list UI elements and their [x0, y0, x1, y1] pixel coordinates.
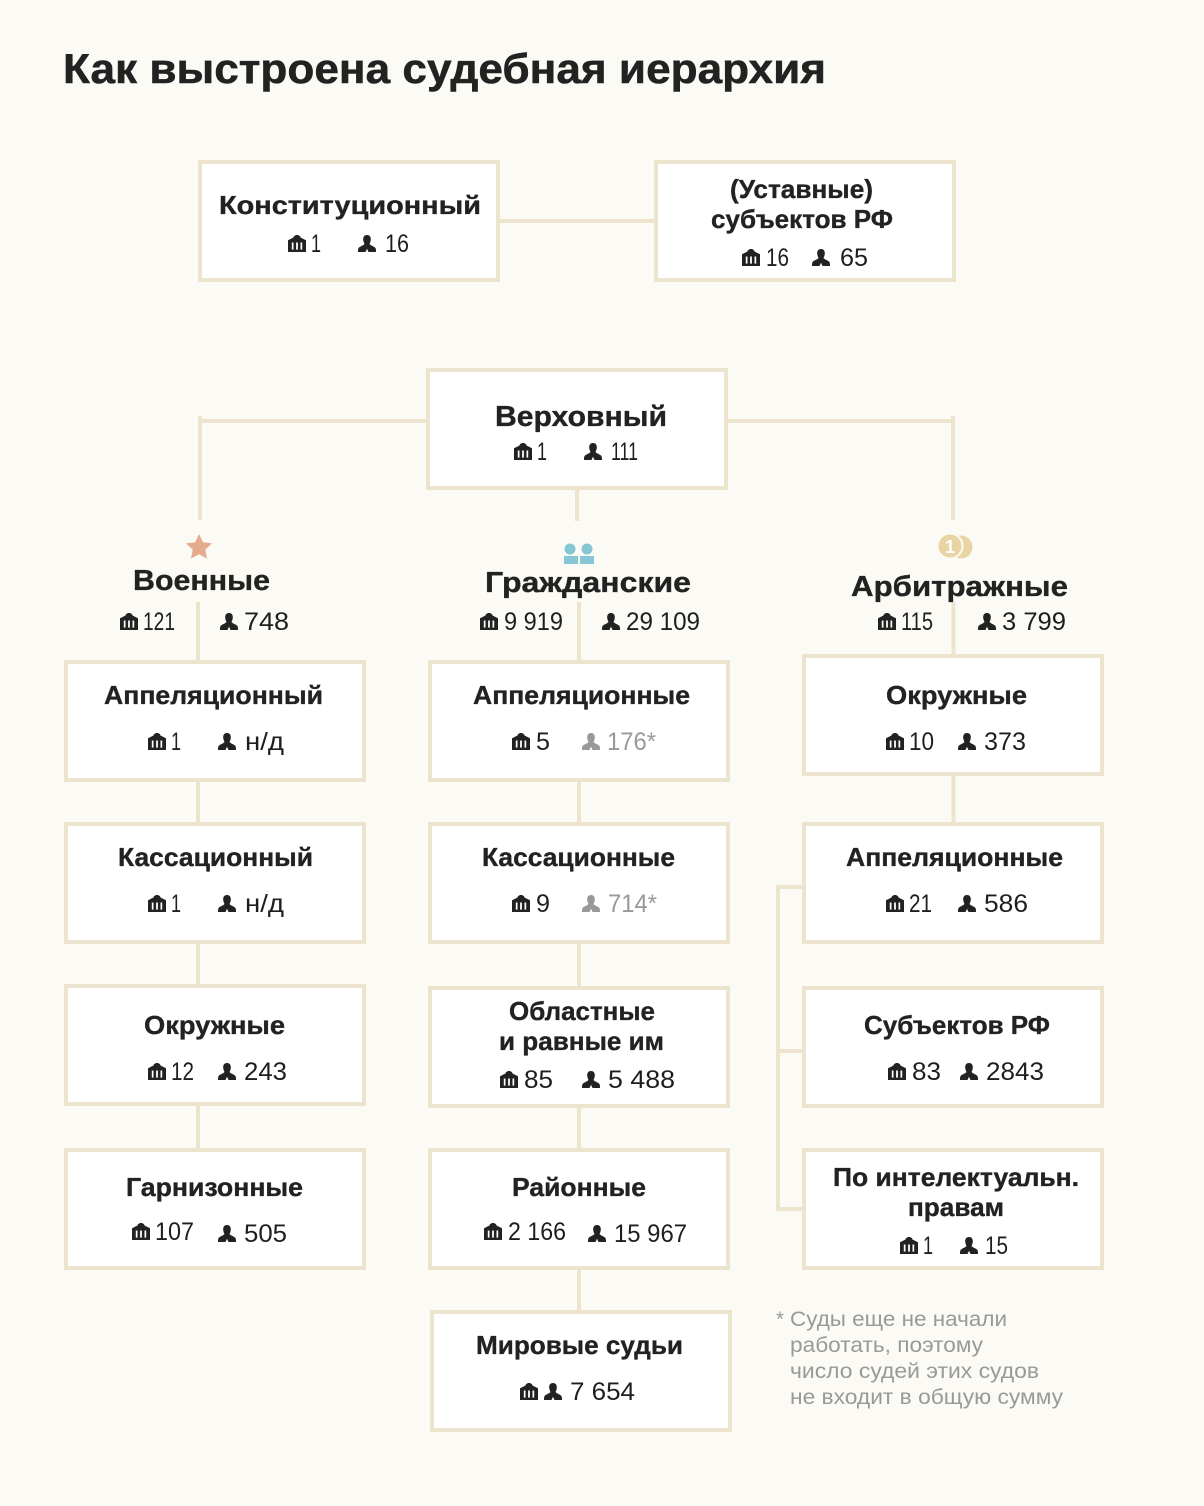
- stats: [520, 1378, 635, 1406]
- heading: Арбитражные: [851, 571, 1068, 603]
- stats: [742, 244, 868, 272]
- heading: Областные: [509, 996, 655, 1026]
- footnote: не входит в общую сумму: [790, 1386, 1064, 1409]
- stats: 5 488: [608, 1066, 675, 1094]
- panel: гражданские Аппеляционные: [430, 662, 728, 780]
- footnote: [776, 1308, 1064, 1409]
- stats: н/д: [245, 890, 284, 918]
- heading: [833, 1162, 1079, 1222]
- heading: (Уставные): [730, 174, 873, 204]
- heading: Окружные: [144, 1010, 285, 1040]
- icon: coins: 1: [945, 537, 955, 557]
- stats: 15: [985, 1232, 1008, 1260]
- stats: [484, 1218, 687, 1248]
- stats: 1: [923, 1232, 933, 1260]
- stats: 115: [901, 608, 933, 636]
- heading: [499, 996, 664, 1056]
- icon: star: [186, 534, 212, 559]
- panel: Субъектов РФ: [804, 988, 1102, 1106]
- heading: По интелектуальн.: [833, 1162, 1079, 1192]
- heading: правам: [908, 1192, 1004, 1222]
- panel: По интелектуальн. правам: [804, 1150, 1102, 1268]
- stats: 85: [524, 1066, 553, 1094]
- column header: Гражданские: [480, 544, 700, 636]
- column header: Арбитражные: [851, 534, 1068, 636]
- stats: 505: [244, 1220, 287, 1248]
- heading: Аппеляционные: [473, 680, 690, 710]
- stats: 16: [766, 244, 789, 272]
- stats: 748: [244, 608, 289, 636]
- stats: [288, 230, 409, 258]
- heading: Субъектов РФ: [864, 1010, 1050, 1040]
- stats: 29 109: [626, 608, 700, 636]
- stats: 21: [909, 890, 932, 918]
- stats: [132, 1218, 287, 1248]
- heading: Аппеляционный: [104, 680, 323, 710]
- footnote: *: [776, 1308, 784, 1331]
- stats: [888, 1058, 1044, 1086]
- stats: 1: [537, 438, 547, 466]
- stats: 2 166: [508, 1218, 566, 1246]
- stats: 107: [155, 1218, 194, 1246]
- stats: [886, 728, 1026, 756]
- heading: Военные: [133, 565, 270, 597]
- panel: арбитражные Аппеляционные: [804, 824, 1102, 942]
- heading: Районные: [512, 1172, 646, 1202]
- stats: 111: [611, 438, 638, 466]
- stats: 9: [536, 890, 550, 918]
- icon: coins: [938, 534, 972, 558]
- panel: военный Аппеляционный: [66, 662, 364, 780]
- stats: 714*: [608, 890, 657, 918]
- panel: военные Окружные: [66, 986, 364, 1104]
- footnote: Суды еще не начали: [790, 1308, 1007, 1331]
- stats: 243: [244, 1058, 287, 1086]
- stats: [512, 728, 656, 756]
- stats: 121: [143, 608, 175, 636]
- stats: 586: [984, 890, 1028, 918]
- heading: Кассационный: [118, 842, 313, 872]
- panel: Мировые судьи: [432, 1312, 730, 1430]
- heading: Мировые судьи: [476, 1330, 683, 1360]
- stats: 1: [171, 890, 181, 918]
- stats: н/д: [245, 728, 284, 756]
- title: Как выстроена судебная иерархия: [63, 45, 826, 92]
- panel: Уставные суды субъектов РФ: [656, 162, 954, 280]
- heading: Конституционный: [219, 190, 481, 220]
- stats: [148, 890, 284, 918]
- stats: 5: [536, 728, 550, 756]
- stats: 1: [311, 230, 321, 258]
- stats: [148, 1058, 287, 1086]
- stats: 15 967: [614, 1220, 687, 1248]
- stats: 83: [912, 1058, 941, 1086]
- footnote: число судей этих судов: [790, 1360, 1039, 1383]
- stats: 176*: [607, 728, 656, 756]
- panel: Районные: [430, 1150, 728, 1268]
- stats: 9 919: [504, 608, 563, 636]
- stats: 2843: [986, 1058, 1044, 1086]
- heading: [711, 174, 893, 234]
- stats: [120, 608, 289, 636]
- heading: субъектов РФ: [711, 204, 893, 234]
- stats: [480, 608, 700, 636]
- stats: [500, 1066, 675, 1094]
- panel: Гарнизонные: [66, 1150, 364, 1268]
- panel: Верховный суд: [428, 370, 726, 488]
- stats: 373: [984, 728, 1026, 756]
- panel: гражданские Кассационные: [430, 824, 728, 942]
- heading: Аппеляционные: [846, 842, 1063, 872]
- stats: 10: [909, 728, 934, 756]
- heading: Верховный: [495, 401, 667, 433]
- heading: Гарнизонные: [126, 1172, 303, 1202]
- panel: Областные и равные им: [430, 988, 728, 1106]
- connector lines: [198, 221, 954, 1310]
- stats: 3 799: [1002, 608, 1066, 636]
- stats: 12: [171, 1058, 194, 1086]
- stats: [512, 890, 657, 918]
- stats: 16: [385, 230, 409, 258]
- panel: арбитражные Окружные: [804, 656, 1102, 774]
- footnote: работать, поэтому: [790, 1334, 984, 1357]
- stats: [878, 608, 1066, 636]
- stats: [148, 728, 284, 756]
- panel: военный Кассационный: [66, 824, 364, 942]
- stats: 7 654: [570, 1378, 635, 1406]
- column header: Военные: [120, 534, 289, 636]
- stats: [514, 438, 638, 466]
- heading: Окружные: [886, 680, 1027, 710]
- stats: [886, 890, 1028, 918]
- icon: people: [564, 544, 594, 564]
- heading: Кассационные: [482, 842, 675, 872]
- heading: и равные им: [499, 1026, 664, 1056]
- heading: Гражданские: [485, 567, 691, 599]
- stats: [900, 1232, 1008, 1260]
- stats: 65: [840, 244, 868, 272]
- panel: Конституционный суд: [200, 162, 498, 280]
- stats: 1: [171, 728, 181, 756]
